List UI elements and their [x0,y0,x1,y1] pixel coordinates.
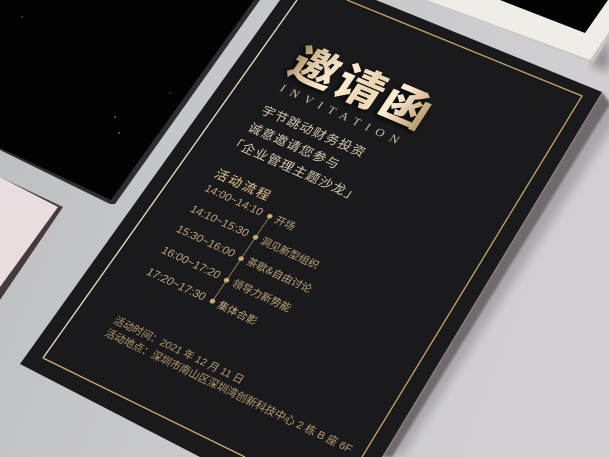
schedule row 5: 17:20~17:30 [144,266,208,303]
schedule row 4: 16:00~17:20 [159,245,223,282]
event location: 活动地点：深圳市南山区深圳湾创新科技中心 2 栋 B 座 6F [102,328,354,456]
activity 2: 洞见新型组织 [258,233,323,271]
intro text line 2: 诚意邀请您参与 [245,118,345,172]
event date: 活动时间：2021 年 12 月 11 日 [111,315,246,386]
activity 1: 开场 [272,212,299,233]
white framed card [427,0,609,72]
schedule row 3: 15:30~16:00 [173,224,237,260]
intro text: 宇节跳动财务投资 [258,101,371,161]
timeline dot 1 [266,213,273,219]
card shadow [382,92,609,457]
timeline dot 2 [251,234,259,240]
schedule heading: 活动流程 [211,164,277,204]
timeline line [212,216,269,301]
activity 4: 领导力新势能 [229,275,295,314]
intro text line 3: 「企业管理主题沙龙」 [225,132,365,205]
schedule row 2: 14:10~15:30 [188,203,251,239]
black textured card [0,0,260,204]
schedule row 1: 14:00~14:10 [202,183,265,218]
timeline dot 5 [208,298,216,304]
pink card [0,177,63,300]
subtitle INVITATION: INVITATION [277,82,409,149]
timeline dot 4 [223,276,230,283]
activity 5: 集体合影 [215,296,262,327]
activity 3: 茶歇&自由讨论 [244,254,316,296]
title: 邀请函 [278,30,451,141]
timeline dot 3 [237,255,245,261]
